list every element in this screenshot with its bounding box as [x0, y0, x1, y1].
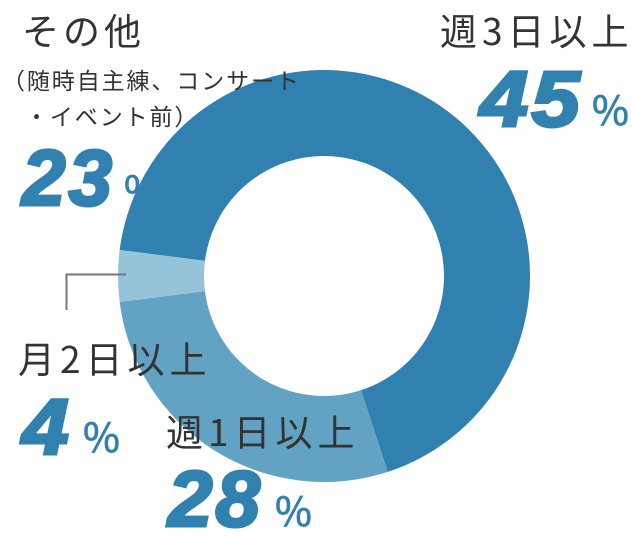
value: 45 [478, 54, 583, 143]
label: 週3日以上 [440, 2, 632, 56]
percent sign: other (partly behind donut): % [124, 159, 161, 217]
label: その他 [22, 2, 145, 56]
label group: other [2, 2, 301, 222]
value: 4 [20, 382, 72, 471]
segment: 2 days a month or more [118, 250, 205, 302]
percent sign: % [83, 406, 120, 464]
value: 28 [166, 454, 263, 543]
leader line [66, 274, 126, 310]
value: 23 [20, 133, 115, 222]
label group: 1 day a week [166, 403, 360, 543]
percent sign: % [592, 79, 629, 137]
donut chart [118, 70, 530, 482]
segment: 1 day a week or more [120, 291, 388, 482]
segment: 3 days a week or more [120, 70, 530, 472]
label group: 2 days a month [18, 330, 212, 471]
percent sign: % [275, 480, 312, 538]
note: （随時自主練、コンサート [2, 62, 301, 96]
label: 月2日以上 [18, 330, 212, 384]
label: 週1日以上 [166, 403, 360, 457]
label group: 3 days a week [440, 2, 632, 143]
note second line: ・イベント前） [25, 98, 199, 132]
